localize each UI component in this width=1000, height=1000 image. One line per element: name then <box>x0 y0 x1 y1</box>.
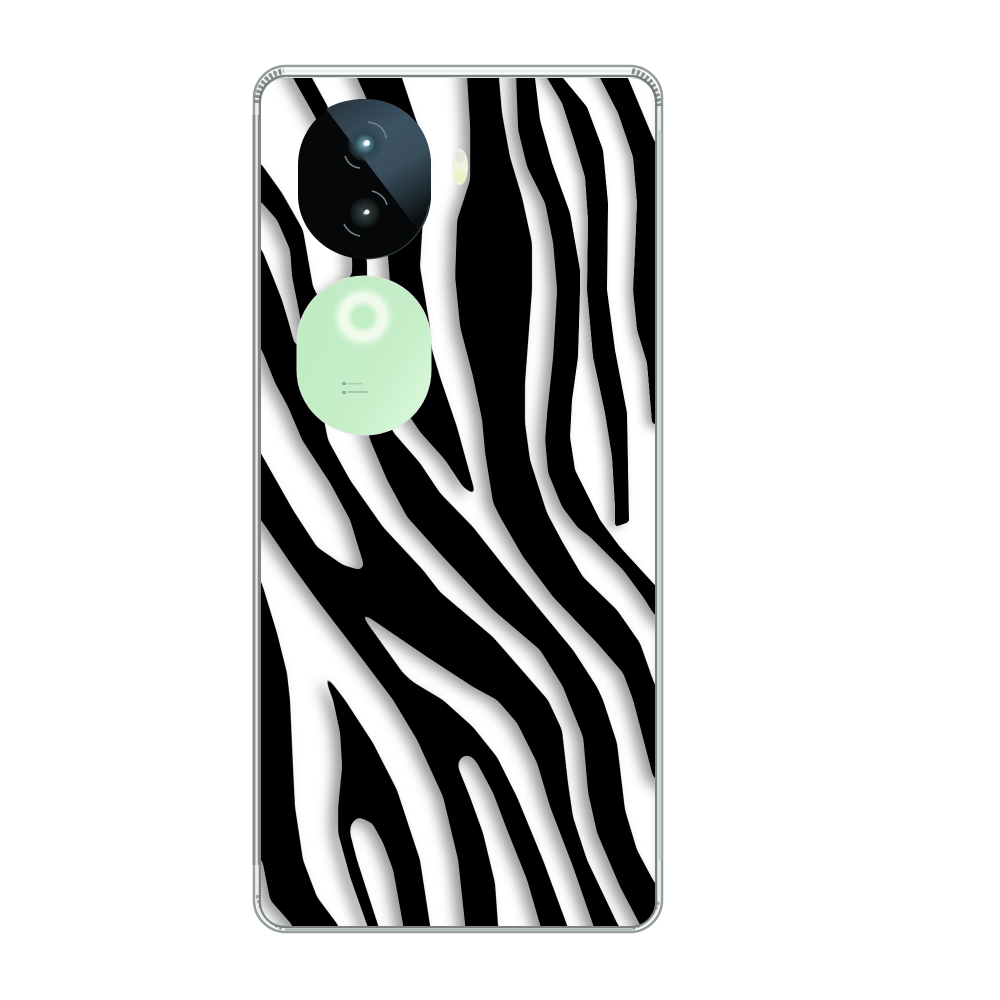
panel: zebra print back <box>261 78 655 926</box>
clear case frame <box>254 66 662 932</box>
flash <box>452 149 468 185</box>
ring light <box>330 284 396 350</box>
tiny print marks <box>342 382 368 394</box>
upper lens <box>345 122 386 168</box>
lower lens <box>344 191 387 236</box>
phone case product illustration <box>252 64 664 934</box>
mint green disc <box>297 276 431 435</box>
camera module <box>298 99 431 259</box>
